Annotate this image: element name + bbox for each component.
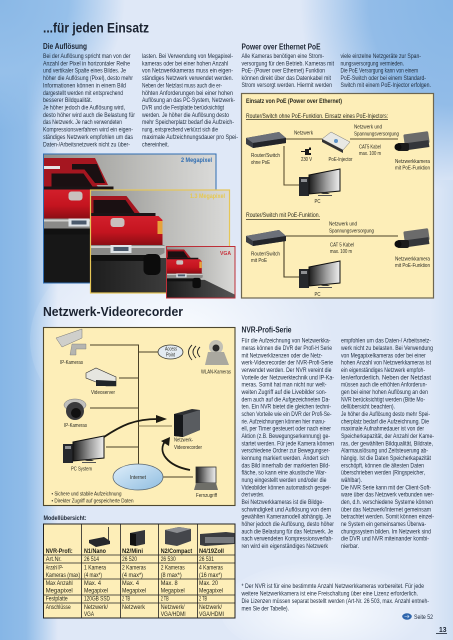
diagram labels: first diagram: CAT5 Kabel [359, 144, 381, 150]
text block: Die Auflösung column 1: dargestellt werden mit entsprechend [43, 90, 123, 97]
text block: NVR column 1: nung eingestellt werden und/oder die [242, 477, 327, 484]
text block: Die Auflösung column 1: besserer Bildqualität. [43, 97, 92, 104]
table row: connections: Netzwerk/ [199, 604, 222, 611]
diagram labels: first diagram: PC [314, 199, 321, 205]
table: model overview [44, 524, 235, 618]
photo comparison: resolutions [43, 154, 236, 298]
text block: Die Auflösung column 2 [141, 53, 238, 148]
text block: NVR column 2: empfohlen um das Daten-/ Arbeitsnetz- [341, 338, 431, 345]
page reference: Seite 52 [414, 614, 433, 621]
photo: 1.3 Megapixel: 1.3 Megapixel [190, 194, 225, 200]
icon: power plug [301, 148, 311, 155]
text block: NVR column 1: dern auch auf die Aufgezeichneten Da- [242, 396, 330, 403]
table row: megapixel: Max Anzahl [46, 580, 73, 587]
text block: NVR column 2: ne System ein gemeinsames Überwa- [341, 520, 426, 528]
table row: megapixel: Max. 8 [161, 580, 178, 587]
text block: Die Auflösung column 2: nung, entsprechend verkürzt sich die [142, 127, 218, 134]
table row: hard disk: 2 TB [122, 596, 130, 603]
text block: Die Auflösung column 1: Anzahl der Pixel in horizontaler Reihe [43, 60, 130, 67]
text block: NVR column 1: schwindigkeit und Auflösung von dem [242, 506, 331, 513]
diagram labels: second diagram: max. 100 m [330, 249, 352, 255]
icon: internet globe: Internet [130, 475, 146, 481]
text block: Die Auflösung column 2: kameras oder bei einer hohen Anzahl [142, 60, 228, 67]
text block: NVR column 2: NVR berücksichtigt werden (Bitte Mo- [341, 396, 425, 403]
cables: second diagram [284, 236, 398, 277]
diagram labels: first diagram: Router/Switch [251, 153, 280, 159]
text block: NVR column 1: auch die Belastung für das Netzwerk. Je [242, 528, 333, 535]
panel: network diagram [44, 328, 235, 506]
text block: PoE column 1: versorgung für den Betrieb. Kameras mit [242, 60, 334, 67]
text block: NVR column 1: schen Vorteile wie ein DVR der Profi-Se- [242, 411, 332, 418]
icon: camera [394, 228, 430, 248]
text block: NVR column 1: meras können die DVR der Profi-H Serie [242, 345, 332, 352]
icon: N2/Compact [165, 527, 191, 546]
diagram labels: first diagram: PoE-Injector [328, 157, 353, 163]
text block: NVR column 2: hohen Anzahl von Netzwerkkameras ist [341, 360, 431, 367]
table row: Art.Nr.: 26 514 [84, 556, 99, 563]
panel heading: Einsatz von PoE (Power over Ethernet) [246, 98, 342, 105]
text block: PoE column 1: PoE- (Power over Ethernet) Funktion [242, 68, 325, 75]
text block: NVR column 1: ten. Ein NVR bietet die gleichen techni- [242, 404, 331, 411]
diagram labels: Videorecorder [174, 445, 202, 451]
text block: NVR column 2: Die NVR Serie kann mit der Client-Soft- [341, 484, 431, 491]
text block: NVR column 1: mit Netzwerklizenzen oder die Netz- [242, 352, 322, 359]
text block: NVR column 1: Aktion (z.B. Bewegungserkennung) ge- [242, 433, 330, 440]
text block: PoE column 1: Strom versorgt werden. Hiermit werden [242, 82, 332, 89]
table row: megapixel: Megapixel [161, 588, 185, 595]
diagram labels: second diagram: mit PoE [251, 258, 267, 264]
icon: wifi waves [188, 345, 200, 360]
text block: NVR column 1: ren wird ein eigenständiges Netzwerk [242, 543, 329, 550]
table row: cameras: 1 Kamera [84, 564, 106, 572]
text block: NVR column 2: müssen auch die erhöhten Anforderun- [341, 382, 427, 389]
heading: Netzwerk-Videorecorder: Netzwerk-Videorecorder [43, 304, 183, 319]
icon: PoE injector [322, 132, 350, 153]
text block: NVR column 1: nach verwendeten Kompressionsverfah- [242, 536, 333, 543]
diagram labels: PC System [71, 466, 92, 472]
text block: PoE column 1: können direkt über das Datenkabel mit [242, 75, 331, 82]
table row: cameras: Kameras (max) [46, 572, 80, 579]
icon: access point: Access [165, 346, 177, 352]
page reference [402, 613, 433, 621]
text block: Die Auflösung column 2: DVR und die Festplatte berücksichtigt [142, 104, 224, 112]
table row: connections: VGA [84, 611, 94, 618]
panel: Einsatz von PoE [242, 94, 434, 298]
table row: hard disk [46, 596, 207, 603]
text block: PoE column 2: nungsversorgung vermieden. [340, 60, 404, 67]
diagram labels: Fernzugriff [196, 493, 217, 499]
subheading: with PoE: Router/Switch mit PoE-Funktion. [246, 212, 320, 219]
icon: access point: Point [166, 352, 175, 358]
text block: NVR column 2: nierbar. [341, 543, 359, 550]
table row: connections: Anschlüsse [46, 604, 71, 611]
text block: Die Auflösung column 2: höhten Anforderungen bei einer hohen [142, 90, 233, 97]
table row: cameras: (8 max*) [161, 572, 182, 579]
text block: NVR column 2: über das Netzwerk/Internet gemeinsam [341, 506, 431, 513]
text block: NVR column 2: maximale Aufnahmedauer ist von der [341, 426, 425, 433]
text block: NVR column 2: len/erforderlich. Neben der Netzlast [341, 374, 431, 381]
icon: router with PoE [246, 230, 286, 246]
text block: NVR column 2: von Megapixelkameras oder bei einer [341, 352, 426, 359]
text block: NVR column 1: Für die Aufzeichnung von Netzwerkka- [242, 338, 330, 345]
text block: Die Auflösung column 2: chereinheit. [142, 141, 169, 148]
diagram labels: Videoserver [91, 390, 115, 396]
text block: Die Auflösung column 2: Auflösung an das PC-System, Netzwerk- [142, 97, 235, 104]
diagram labels: second diagram: PC [314, 292, 321, 298]
text block: NVR column 1: fläche, so kann eine akustische War- [242, 470, 326, 477]
diagram labels: IP-Kameras [64, 423, 87, 429]
table row: hard disk: 120GB SSD [84, 596, 110, 603]
text block: Die Auflösung column 1: Daten-/Arbeitsnetzwerk nicht zu über- [43, 141, 130, 148]
text block: NVR column 1: weiten Zugriff auf die Livebilder son- [241, 389, 326, 396]
photo: 2 Megapixel [43, 154, 216, 284]
text block: NVR column 1: werk-Videorecorder der NVR-Profi-Serie [241, 360, 333, 367]
icon: dome camera [64, 399, 86, 420]
table row: cameras: 2 Kameras [161, 564, 185, 572]
subheading: without PoE: Router/Switch ohne PoE-Funktion. Einsatz eines PoE-Injectors: [246, 113, 388, 120]
text block: PoE column 2: Die PoE Versorgung kann von einem [340, 68, 418, 75]
cables: first diagram [284, 139, 398, 185]
diagram labels: first diagram: Netzwerk und [354, 124, 382, 130]
table row: Art.Nr.: 26 520 [122, 556, 137, 563]
feature bullets [52, 492, 134, 504]
icon: laptop [194, 467, 218, 490]
text block: Die Auflösung column 1: desto höher wird auch die Belastung für [43, 112, 136, 119]
diagram labels: first diagram: mit PoE-Funktion [395, 166, 430, 172]
table row: cameras: 4 Kameras [199, 564, 224, 572]
text block: PoE column 2: viele einzelne Netzgeräte zur Span- [340, 53, 421, 60]
table header row: N4/19Zoll [199, 548, 224, 555]
diagram labels: IP-Kameras [60, 360, 83, 366]
table row: megapixel [46, 580, 223, 595]
text block: NVR column 1: startet werden. Für jede Kamera können [242, 440, 334, 447]
text block: NVR column 2: erschöpft, können die ältesten Daten [341, 462, 424, 469]
table row: hard disk: 2 TB [161, 596, 169, 603]
table row: Art.Nr.: Art.Nr. [46, 556, 62, 563]
table row: megapixel: Megapixel [122, 588, 146, 595]
table row: connections: VGA/HDMI [161, 611, 186, 618]
icon: N4/19Zoll [200, 532, 234, 546]
text block: PoE column 2: Switch mit einem PoE-Injector erfolgen. [340, 82, 431, 89]
text block: NVR column 2: überschrieben werden (Ringspeicher, [341, 470, 425, 477]
text block: NVR column 1: verschiedene Ordner zur Bewegungser- [242, 448, 330, 455]
text block: Die Auflösung column 1: höher die Auflösung (Pixel), desto mehr [43, 75, 134, 82]
icon: network video recorder [174, 409, 200, 437]
text block: Die Auflösung column 2: werden. Je höher die Auflösung desto [141, 112, 229, 119]
network lines [90, 345, 193, 477]
table row: hard disk: 2 TB [199, 596, 207, 603]
diagram labels: WLAN-Kameras [201, 370, 231, 376]
table row: connections: Netzwerk [122, 604, 146, 611]
text block: NVR column 2: chungssystem bilden. Im Netzwerk sind [341, 528, 431, 535]
icon: PC [299, 261, 340, 288]
text block: NVR column 2: die DVR und NVR miteinander kombi- [341, 536, 429, 543]
icon: camera [394, 131, 430, 151]
text block: NVR column 1 [241, 338, 335, 550]
table row: cameras: 2 Kameras [122, 564, 147, 572]
icon: IP camera [56, 329, 86, 355]
diagram labels: first diagram: 230 V [301, 157, 312, 163]
text block: NVR column 2: ras, der gewählten Bildqualität, Bildrate, [341, 440, 433, 447]
text block: Die Auflösung column 2: ständiges Netzwerk verwendet werden. [142, 75, 233, 82]
diagram labels: second diagram: Netzwerk und [329, 222, 357, 228]
text block: PoE column 1: Alle Kameras benötigen eine Strom- [242, 53, 324, 60]
arrow: remote access to recorder [161, 437, 190, 470]
text block: NVR column 1: meras. Somit hat man nicht nur welt- [242, 382, 326, 389]
text block: NVR column 2 [340, 338, 434, 550]
table header row: N2/Mini [122, 548, 143, 555]
icon: WLAN camera [205, 340, 229, 365]
table row: Art.Nr.: 26 531 [199, 556, 214, 563]
text block: Die Auflösung column 1: ständiges Netzwerk empfohlen um das [43, 134, 134, 141]
footnote: men Sie der Tabelle). [242, 605, 289, 612]
text block: PoE column 2 [340, 53, 431, 89]
heading: Die Auflösung: Die Auflösung [43, 42, 87, 51]
text block: NVR column 1: gewählten Kameramodell abhängig. Je [242, 514, 331, 521]
text block: NVR column 2: ein eigenständiges Netzwerk empfoh- [341, 367, 425, 374]
text block: NVR column 2: werk nicht zu belasten. Bei Verwendung [340, 345, 433, 352]
text block: NVR column 1: Bei Netzwerkkameras ist die Bildge- [242, 499, 324, 506]
icon: PC [299, 169, 340, 196]
photo: 1.3 Megapixel [90, 189, 230, 294]
title: ...für jeden Einsatz [43, 20, 149, 36]
diagram labels: second diagram: mit PoE-Funktion [395, 263, 430, 269]
icon: N1/Nano [89, 527, 110, 547]
text block: NVR column 1: Videobilder können automatisch gespei- [242, 484, 331, 491]
icon: PC system [63, 436, 104, 463]
table row: cameras: (4 max*) [122, 572, 143, 579]
icon: N2/Mini [130, 530, 145, 546]
icon: access point [158, 345, 183, 359]
text block: NVR column 1: rie. Aufzeichnungen können hier manu- [242, 418, 326, 425]
page number: 13 [439, 625, 446, 634]
text block: NVR column 2: hängig. Ist die Daten Speicherkapazität [341, 455, 431, 462]
text block: NVR column 2: cherplatz bedarf die Aufzeichnung. Die [341, 418, 429, 425]
table row: connections [46, 604, 224, 618]
text block: Die Auflösung column 1: und vertikaler Spalte eines Bildes. Je [43, 68, 126, 75]
photo: VGA: VGA [220, 251, 231, 257]
table row: cameras [46, 564, 224, 579]
diagram labels: first diagram: max. 100 m [359, 151, 381, 157]
diagram labels: Netzwerk- [174, 438, 193, 444]
table header row: N2/Compact [161, 548, 193, 555]
text block: Die Auflösung column 1 [43, 53, 136, 148]
table header row [46, 548, 224, 555]
table header row: NVR-Profi: [46, 548, 73, 555]
feature bullets: • Direkter Zugriff auf gespeicherte Daten [52, 498, 134, 504]
text block: PoE column 1 [242, 53, 334, 89]
table row: cameras: (16 max*) [199, 572, 222, 579]
text block: Die Auflösung column 2: lasten. Bei Verwendung von Megapixel- [142, 53, 233, 60]
heading: NVR-Profi-Serie: NVR-Profi-Serie [242, 326, 292, 334]
diagram labels: first diagram [251, 124, 430, 205]
text block: NVR column 1: verwendet werden. Der NVR vereint die [242, 367, 332, 374]
text block: NVR column 2: gen bei einer hohen Auflösung an den [341, 389, 428, 396]
diagram labels: first diagram: ohne PoE [251, 160, 270, 166]
icon: internet globe [113, 464, 163, 490]
footnote [241, 583, 429, 612]
text block: NVR column 1: Vorteile der Netzwerktechnik und IP-Ka- [242, 374, 334, 381]
text block: NVR column 1: kennung markiert werden. Ändert sich [242, 454, 329, 462]
text block: Die Auflösung column 1: Je höher jedoch die Auflösung wird, [43, 104, 125, 112]
table row: cameras: Anzahl IP- [46, 564, 63, 572]
text block: NVR column 1: chert werden. [242, 492, 264, 499]
table row: megapixel: Max. 20 [199, 580, 218, 587]
text block: NVR column 2: dellübersicht beachten). [341, 404, 395, 411]
text block: Die Auflösung column 2: mehr Speicherplatz bedarf die Aufzeich- [142, 119, 234, 126]
text block: Die Auflösung column 1: Kompressionsverfahren wird ein eigen- [43, 127, 133, 134]
table row: connections: VGA/HDMI [199, 611, 224, 618]
photo: VGA [166, 246, 236, 298]
diagram labels: second diagram: Router/Switch [251, 252, 280, 258]
text block: Die Auflösung column 2: von Netzwerkkameras muss ein eigen- [142, 68, 233, 75]
arrow: PC to recorder [104, 415, 167, 437]
diagram labels: second diagram: Spannungsversorgung [329, 228, 374, 234]
text block: Die Auflösung column 2: Neben der Netzlast muss auch die er- [142, 82, 222, 89]
feature bullets: • Sichere und stabile Aufzeichnung [52, 492, 122, 498]
table row: megapixel: Max. 4 [84, 580, 101, 587]
diagram labels: first diagram: Netzwerkkamera [395, 159, 430, 165]
table row: megapixel: Max. 4 [122, 580, 139, 587]
heading: Power over Ethernet: Power over Ethernet PoE [242, 42, 321, 52]
table row: connections: Netzwerk/ [161, 604, 185, 611]
text block: Die Auflösung column 1: Informationen können in einem Bild [43, 82, 126, 89]
diagram labels: second diagram [251, 222, 430, 298]
text block: NVR column 2: Alarmauslösung und Zeitsteuerung ab- [341, 448, 428, 455]
diagram labels [60, 360, 231, 499]
table row: megapixel: Megapixel [46, 588, 73, 595]
diagram labels: second diagram: CAT 5 Kabel [330, 242, 354, 248]
icon: video server [86, 368, 116, 386]
text block: Die Auflösung column 2: maximale Aufzeichnungsdauer pro Spei- [142, 134, 238, 141]
table row: connections: Netzwerk/ [84, 604, 108, 611]
table row: Art.Nr. [46, 556, 214, 563]
table row: megapixel: Megapixel [199, 588, 223, 595]
text block: NVR column 1: ell, per Timer gesteuert oder nach einer [242, 426, 332, 433]
diagram labels: second diagram: Netzwerkkamera [395, 256, 430, 262]
table row: megapixel: Megapixel [84, 588, 108, 595]
text block: Die Auflösung column 1: das Netzwerk. Je nach verwendeten [43, 119, 122, 126]
icon: router without PoE [246, 132, 286, 148]
diagram labels: first diagram: Netzwerk [294, 130, 313, 136]
text block: PoE column 2: PoE-Switch oder bei einem Standard- [340, 75, 426, 82]
text block: NVR column 1: höher jedoch die Auflösung, desto höher [242, 521, 335, 528]
table row: hard disk: Festplatte [46, 596, 68, 603]
text block: NVR column 1: das Bild innerhalb der markierten Bild- [242, 462, 330, 469]
diagram labels: first diagram: Spannungsversorgung [354, 132, 399, 138]
heading: Modellübersicht: Modellübersicht: [44, 515, 86, 522]
table row: Art.Nr.: 26 530 [161, 556, 176, 563]
icon: reference arrow [402, 613, 412, 620]
text block: Die Auflösung column 1: Bei der Auflösung spricht man von der [43, 53, 131, 60]
table row: cameras: (4 max*) [84, 572, 102, 579]
text block: NVR column 2: wählbar). [340, 477, 362, 484]
photo: 2 Megapixel: 2 Megapixel [181, 158, 212, 164]
table header row: N1/Nano [84, 548, 106, 555]
